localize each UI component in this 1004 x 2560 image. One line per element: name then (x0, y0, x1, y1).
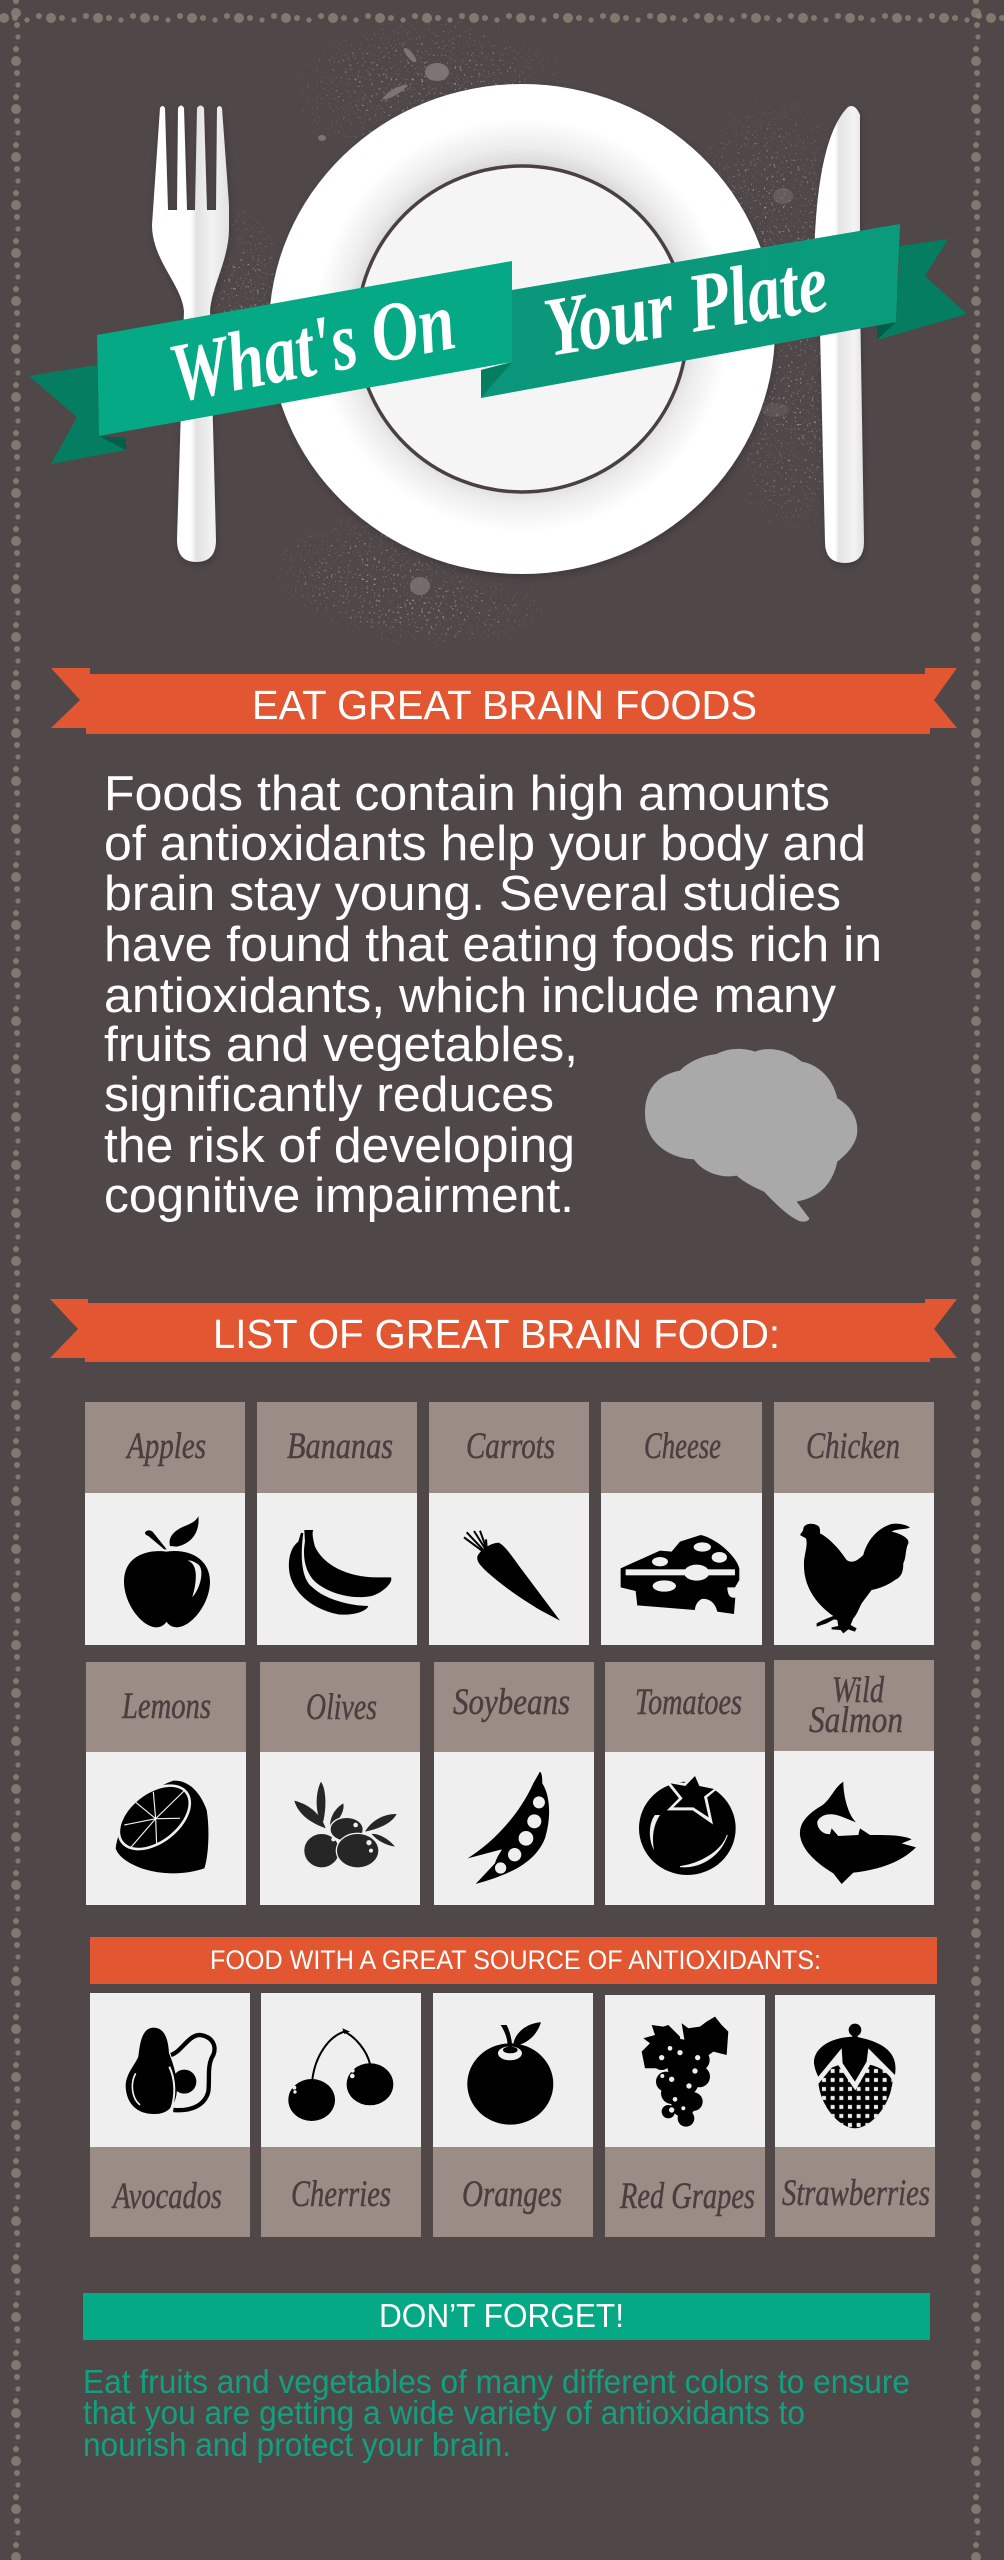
tile: bananas (257, 1402, 417, 1645)
closing note (83, 2363, 910, 2463)
intro paragraph: have found that eating foods rich in (104, 918, 882, 972)
splatter blots (318, 46, 793, 595)
icon: chicken (800, 1524, 910, 1633)
icon: brain (645, 1049, 857, 1222)
tile: cheese (601, 1402, 762, 1645)
icon: soybean pod (468, 1772, 549, 1884)
dotted border: left (0, 0, 32, 2560)
icon: strawberry (814, 2024, 896, 2128)
tile: strawberries (775, 1995, 935, 2237)
icon: cheese (621, 1535, 739, 1614)
ribbon heading: eat great brain foods (51, 668, 957, 734)
bar: don't forget: DON’T FORGET! (379, 2297, 624, 2334)
tile: carrots (429, 1402, 589, 1645)
tile: apples: Apples (125, 1426, 206, 1467)
icon: lemon (105, 1771, 208, 1873)
right ribbon panel (481, 224, 900, 398)
intro paragraph: brain stay young. Several studies (104, 867, 841, 921)
tile: cherries: Cherries (291, 2174, 391, 2215)
tile: cheese: Cheese (644, 1426, 721, 1467)
intro paragraph: antioxidants, which include many (104, 969, 837, 1023)
tile: avocados (90, 1993, 250, 2237)
tile: wild salmon: Salmon (809, 1700, 903, 1741)
icon: grapes (642, 2017, 728, 2127)
plate (269, 84, 775, 574)
closing note: Eat fruits and vegetables of many different colors to ensure (83, 2363, 910, 2400)
intro paragraph: the risk of developing (104, 1119, 575, 1173)
tile: tomatoes: Tomatoes (635, 1682, 742, 1723)
bar: food with a great source of antioxidants (90, 1937, 937, 1984)
tile: oranges: Oranges (462, 2174, 562, 2215)
closing note: nourish and protect your brain. (83, 2426, 511, 2463)
icon: olives (294, 1782, 397, 1868)
tile: red grapes: Red Grapes (619, 2176, 755, 2217)
tile: red grapes (605, 1995, 765, 2237)
left ribbon panel (97, 261, 512, 436)
ribbon heading: eat great brain foods: EAT GREAT BRAIN FOODS (252, 682, 757, 728)
tile: oranges (433, 1993, 593, 2237)
right tail (877, 239, 967, 340)
tile: soybeans (434, 1662, 594, 1905)
tile: soybeans: Soybeans (453, 1682, 570, 1723)
icon: apple (124, 1516, 210, 1627)
tile: wild salmon: Wild (832, 1670, 884, 1711)
tile: carrots: Carrots (466, 1426, 555, 1467)
title text right: Your Plate (538, 236, 834, 375)
tile: lemons: Lemons (121, 1686, 211, 1727)
ribbon heading: list of great brain food (50, 1299, 957, 1362)
icon: carrot (464, 1531, 560, 1621)
fork (152, 106, 229, 562)
icon: cherries (288, 2028, 393, 2121)
tile: avocados: Avocados (111, 2176, 222, 2217)
icon: salmon (800, 1782, 916, 1884)
tile: strawberries: Strawberries (782, 2173, 930, 2214)
tile: chicken: Chicken (806, 1426, 900, 1467)
intro paragraph: cognitive impairment. (104, 1169, 574, 1223)
intro paragraph: Foods that contain high amounts (104, 767, 830, 821)
intro paragraph (104, 767, 882, 1223)
intro paragraph: fruits and vegetables, (104, 1018, 578, 1072)
title text left: What's On (162, 274, 462, 421)
bar: food with a great source of antioxidants: FOOD WITH A GREAT SOURCE OF ANTIOXIDANTS: (210, 1945, 821, 1975)
closing note: that you are getting a wide variety of antioxidants to (83, 2394, 805, 2431)
icon: avocado (126, 2028, 215, 2114)
ribbon fold (481, 362, 512, 398)
left tail (29, 365, 126, 464)
icon: orange (467, 2022, 553, 2125)
tile: olives: Olives (306, 1687, 377, 1728)
dotted border: top (0, 8, 1004, 28)
tile: apples (85, 1402, 245, 1645)
dotted border: right (967, 0, 999, 2560)
tile: wild salmon (774, 1660, 934, 1905)
flour splatter around the plate (190, 10, 860, 650)
icon: tomato (639, 1775, 736, 1875)
knife (814, 106, 864, 563)
icon: bananas (289, 1530, 391, 1615)
plate well (357, 166, 687, 492)
ribbon heading: list of great brain food: LIST OF GREAT BRAIN FOOD: (213, 1311, 780, 1357)
tile: olives (260, 1662, 420, 1905)
tile: chicken (774, 1402, 934, 1645)
tile: cherries (261, 1993, 421, 2237)
title banner (29, 224, 967, 464)
tile: tomatoes (605, 1662, 765, 1905)
bar: don't forget (83, 2293, 930, 2340)
tile: bananas: Bananas (287, 1426, 393, 1467)
intro paragraph: of antioxidants help your body and (104, 817, 866, 871)
tile: lemons (86, 1662, 246, 1905)
intro paragraph: significantly reduces (104, 1068, 554, 1122)
